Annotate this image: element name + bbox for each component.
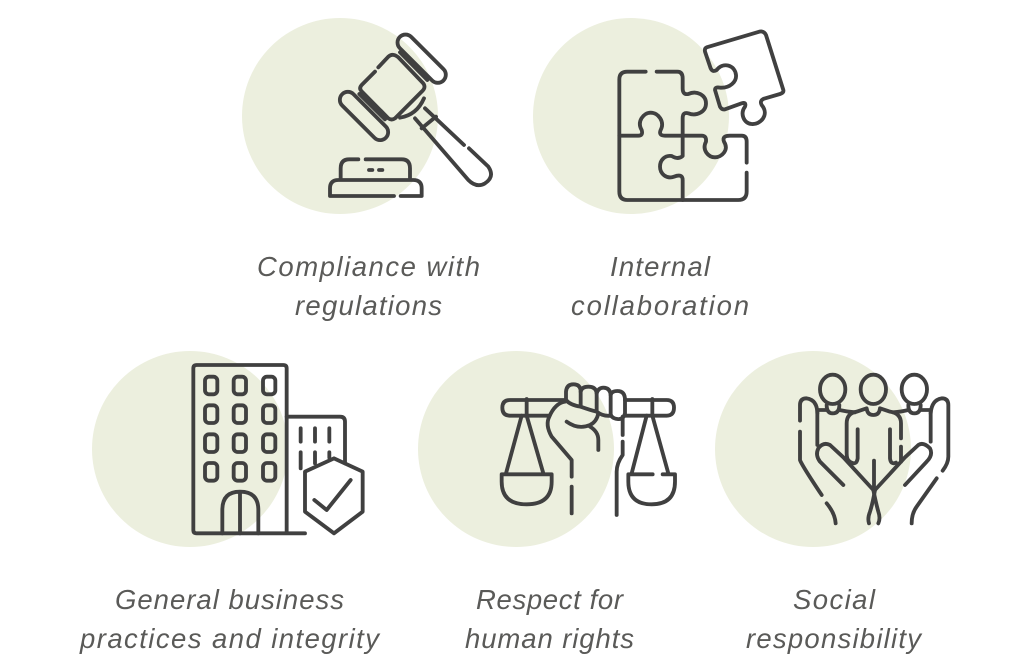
background circle: business practices bbox=[92, 351, 288, 547]
caption: social responsibility: responsibility bbox=[746, 623, 923, 654]
caption: human rights: human rights bbox=[465, 623, 634, 654]
background circle: human rights bbox=[418, 351, 614, 547]
icon: hands holding people bbox=[800, 375, 948, 523]
icon: fist holding scales bbox=[502, 384, 675, 515]
caption: social responsibility: Social bbox=[793, 584, 876, 615]
panel: compliance with regulations bbox=[242, 18, 491, 321]
caption: collaboration: Internal bbox=[610, 251, 711, 282]
icon: puzzle pieces bbox=[619, 31, 783, 200]
panel: social responsibility bbox=[715, 351, 948, 654]
caption: compliance: Compliance with bbox=[257, 251, 480, 282]
panel: general business practices and integrity bbox=[79, 351, 381, 654]
caption: collaboration: collaboration bbox=[571, 290, 749, 321]
panel: respect for human rights bbox=[418, 351, 675, 654]
icon: office building with shield bbox=[193, 365, 363, 533]
background circle: social responsibility bbox=[715, 351, 911, 547]
background circle: compliance bbox=[242, 18, 438, 214]
icon: gavel bbox=[330, 31, 491, 196]
caption: business practices: General business bbox=[115, 584, 344, 615]
caption: business practices: practices and integrity bbox=[79, 623, 381, 654]
caption: human rights: Respect for bbox=[476, 584, 625, 615]
caption: compliance: regulations bbox=[295, 290, 442, 321]
panel: internal collaboration bbox=[533, 18, 783, 321]
background circle: collaboration bbox=[533, 18, 729, 214]
